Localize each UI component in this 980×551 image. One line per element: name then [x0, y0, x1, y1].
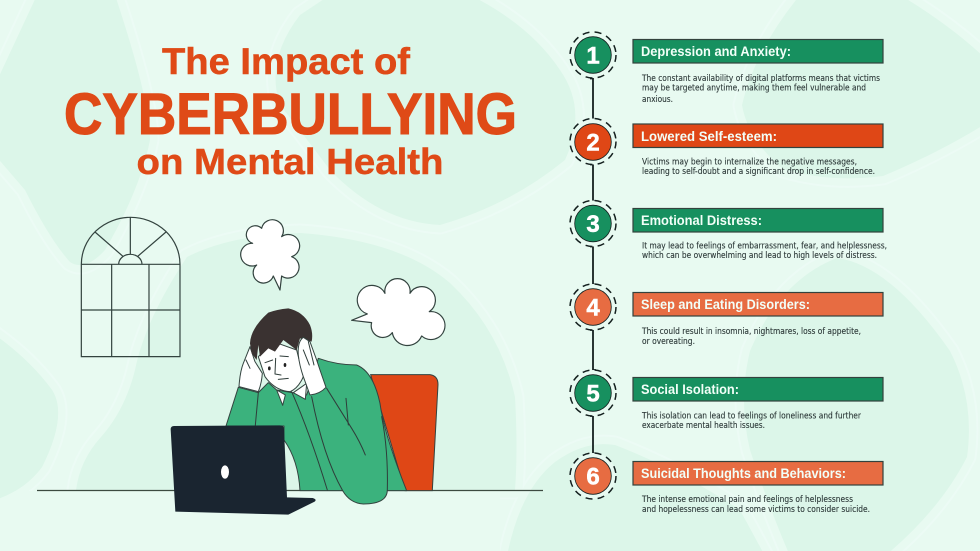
timeline connector	[590, 78, 596, 454]
desk line	[37, 490, 543, 492]
laptop	[171, 425, 316, 515]
badge 4: 4	[586, 294, 600, 322]
step 3	[570, 200, 887, 261]
shirt collar	[277, 383, 307, 405]
step 4: or overeating.	[642, 337, 695, 347]
badge 4	[570, 284, 616, 330]
badge 5: 5	[586, 380, 600, 408]
chair	[371, 375, 438, 491]
step 2	[570, 118, 883, 177]
sweater fold lines	[255, 388, 387, 491]
step 6	[570, 453, 883, 515]
badge 5	[570, 370, 616, 416]
left hand	[239, 347, 262, 392]
badge 3	[570, 200, 616, 246]
step 2: Lowered Self-esteem:	[641, 128, 777, 144]
badge 6: 6	[586, 464, 600, 490]
face	[258, 342, 303, 392]
badge 2: 2	[586, 130, 600, 156]
title: CYBERBULLYING	[64, 82, 517, 147]
step 5: exacerbate mental health issues.	[642, 421, 765, 431]
icon: thought bubble left	[241, 220, 300, 290]
title: on Mental Health	[136, 141, 444, 182]
illustration: stressed man at laptop	[171, 308, 438, 515]
badge 3: 3	[586, 211, 600, 238]
step 3: It may lead to feelings of embarrassment, fear, and helplessness,	[642, 242, 887, 252]
step 1: Depression and Anxiety:	[641, 43, 791, 59]
badge 1	[570, 32, 616, 78]
badge 6	[570, 453, 616, 499]
step 4: Sleep and Eating Disorders:	[641, 296, 810, 312]
step 6: The intense emotional pain and feelings of helplessness	[641, 495, 853, 505]
title: The Impact of	[162, 41, 411, 82]
step 1	[570, 32, 883, 105]
step 5: This isolation can lead to feelings of loneliness and further	[641, 412, 861, 422]
laptop logo	[221, 465, 229, 479]
step 2: leading to self-doubt and a significant drop in self-confidence.	[642, 167, 875, 177]
step 4	[570, 284, 883, 347]
step 5: Social Isolation:	[641, 381, 739, 397]
step 2: Victims may begin to internalize the negative messages,	[642, 158, 857, 168]
icon: thought bubble right	[352, 279, 445, 346]
step 4: This could result in insomnia, nightmares, loss of appetite,	[641, 327, 861, 337]
green sweater	[226, 358, 407, 504]
facial features	[265, 356, 288, 379]
step 6: Suicidal Thoughts and Behaviors:	[641, 465, 846, 481]
icon: arched window	[81, 217, 180, 357]
step 3: Emotional Distress:	[641, 212, 762, 228]
step 3: which can be overwhelming and lead to high levels of distress.	[642, 251, 877, 261]
right hand	[298, 337, 326, 395]
hair	[250, 308, 312, 360]
step 6: and hopelessness can lead some victims to consider suicide.	[642, 505, 870, 515]
step 5	[570, 370, 883, 431]
badge 1: 1	[586, 42, 600, 70]
step 1: may be targeted anytime, making them feel vulnerable and	[642, 84, 866, 94]
step 1: The constant availability of digital platforms means that victims	[641, 74, 880, 84]
step 1: anxious.	[642, 95, 673, 105]
badge 2	[570, 118, 616, 164]
title	[64, 41, 517, 182]
